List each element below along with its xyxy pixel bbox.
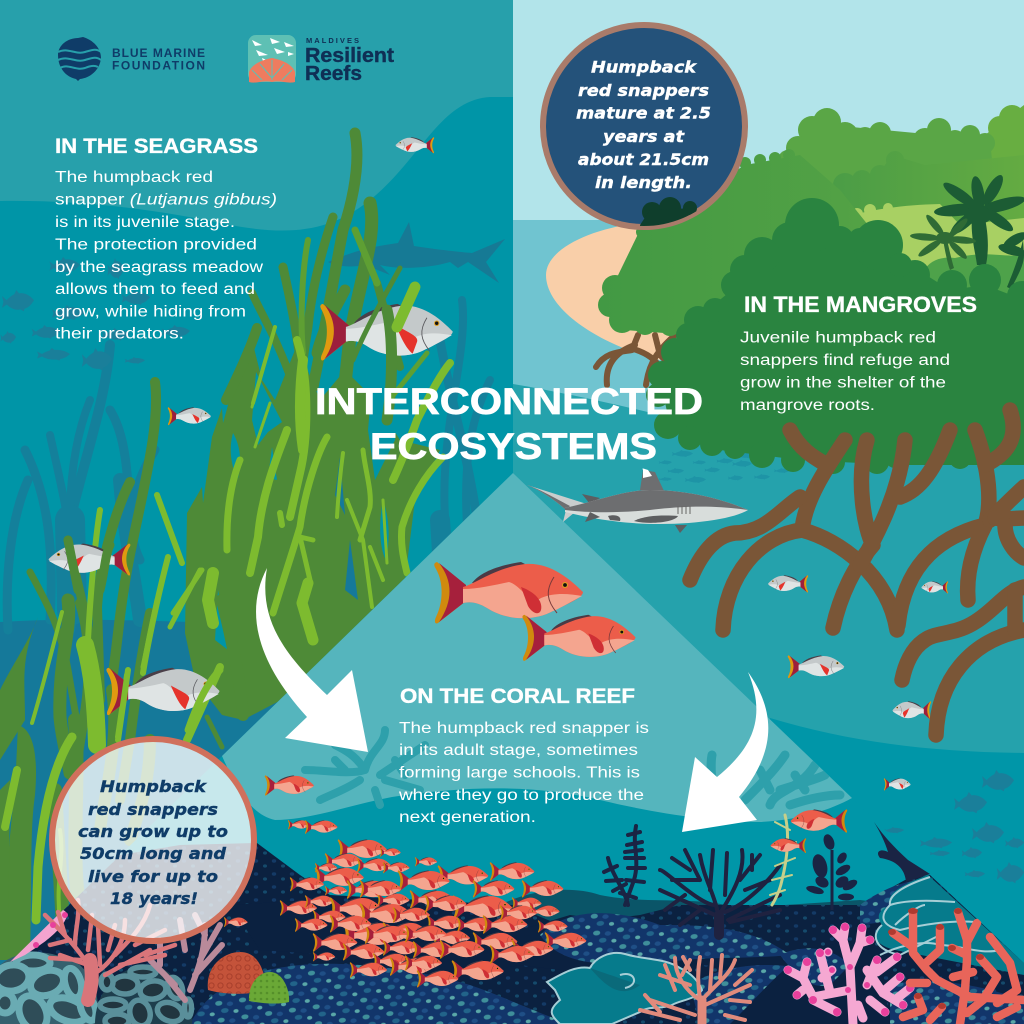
background: right sky and sea	[513, 0, 1024, 1024]
text block: in the seagrass: their predators.	[55, 326, 184, 343]
mangrove canopy: middle tree	[598, 149, 880, 336]
leafy plant, dark	[805, 833, 859, 910]
red snappers: scattered fish	[224, 775, 847, 927]
table coral, lower centre	[547, 953, 702, 1024]
text block: in the mangroves: grow in the shelter of the	[740, 375, 946, 392]
text block: on the coral reef: next generation.	[399, 809, 536, 826]
text block: on the coral reef: The humpback red snapper is	[399, 720, 649, 737]
callout: size and lifespan: Humpback	[100, 777, 208, 796]
mangrove canopy: far trees	[720, 105, 1024, 300]
palm tree, small	[910, 213, 976, 270]
coral: mauve branching	[150, 915, 222, 1000]
callout: size and lifespan: 18 years!	[110, 889, 198, 908]
triangle: coral reef zone	[0, 473, 1024, 1024]
callout: maturity: mature at 2.5	[576, 104, 711, 123]
logo: Maldives Resilient Reefs: MALDIVES	[306, 36, 359, 45]
background: left seagrass water	[0, 0, 513, 1024]
text block: on the coral reef: where they go to produce the	[398, 787, 644, 804]
text block: in the seagrass: The humpback red	[55, 169, 213, 186]
beach	[546, 222, 700, 360]
sea fan coral, dark	[660, 850, 780, 935]
coral: pink branching	[784, 923, 914, 1024]
text block: on the coral reef: forming large schools. This is	[399, 765, 640, 782]
callout: size and lifespan: can grow up to	[78, 822, 228, 841]
brain corals, bottom left	[0, 952, 99, 1024]
logo: Maldives Resilient Reefs	[248, 35, 394, 85]
callout: size and lifespan: 50cm long and	[80, 844, 227, 863]
logo: Blue Marine Foundation: FOUNDATION	[112, 58, 205, 72]
pale feathery plant	[770, 815, 796, 905]
distant fish school near shark	[659, 450, 790, 483]
title: INTERCONNECTED	[315, 381, 703, 422]
palm tree, tall	[934, 172, 1024, 289]
text block: in the seagrass: The protection provided	[55, 237, 257, 254]
silhouette fish, left	[0, 257, 190, 370]
pink coral tips	[33, 912, 68, 948]
brain corals, darker	[95, 965, 192, 1024]
text block: in the seagrass: grow, while hiding from	[55, 304, 246, 321]
logo: Blue Marine Foundation	[58, 37, 205, 81]
seagrass: back blades	[0, 133, 443, 960]
small mangrove roots at beach	[596, 330, 680, 385]
white arrow left	[256, 568, 368, 752]
callout: size and lifespan	[52, 739, 254, 941]
text block: in the mangroves: Juvenile humpback red	[740, 330, 936, 347]
coral silhouettes in light zone	[305, 730, 840, 805]
table coral, right	[876, 875, 1024, 975]
text block: on the coral reef	[398, 685, 649, 826]
mangrove roots	[690, 410, 1024, 735]
logo: Blue Marine Foundation: BLUE MARINE	[112, 46, 205, 60]
coral: salmon branching	[640, 955, 752, 1024]
silhouette fish, right	[884, 770, 1024, 883]
corner pink patch	[10, 910, 67, 962]
background silhouettes: seagrass	[7, 300, 490, 630]
text block: in the seagrass: by the seagrass meadow	[55, 259, 264, 276]
red snappers: large adult pair	[434, 562, 635, 661]
mangrove canopy: foreground tree	[646, 198, 1024, 474]
text block: in the mangroves	[740, 292, 977, 414]
red snapper school	[280, 839, 586, 988]
text block: in the seagrass: is in its juvenile stage.	[55, 214, 235, 231]
callout: maturity: red snappers	[578, 81, 709, 100]
text block: on the coral reef: ON THE CORAL REEF	[400, 685, 635, 708]
callout: size and lifespan: live for up to	[88, 867, 218, 886]
text block: in the seagrass: IN THE SEAGRASS	[55, 135, 258, 158]
callout: maturity	[543, 25, 745, 240]
text block: in the mangroves: IN THE MANGROVES	[744, 292, 977, 317]
silhouette: shark in the seagrass	[328, 222, 505, 283]
orange dome coral	[208, 952, 266, 994]
callout: maturity: Humpback	[591, 58, 697, 77]
fish: grey juvenile snappers in seagrass	[49, 137, 453, 715]
title: ECOSYSTEMS	[370, 426, 657, 467]
reef: rock base and bubbles	[0, 843, 1024, 1024]
coral: pink branching left	[45, 900, 175, 1000]
text block: in the seagrass	[55, 135, 277, 343]
juvenile grey fish, mangroves	[768, 575, 948, 791]
kelp, dark	[604, 826, 645, 905]
logo: Maldives Resilient Reefs: Reefs	[305, 63, 362, 85]
callout: maturity: about 21.5cm	[578, 150, 709, 169]
text block: in the seagrass: allows them to feed and	[55, 281, 255, 298]
callout: maturity: years at	[603, 127, 685, 146]
logo: Maldives Resilient Reefs: Resilient	[305, 45, 394, 67]
text block: on the coral reef: in its adult stage, sometimes	[399, 742, 638, 759]
seagrass: front blades	[68, 268, 450, 740]
shark	[527, 468, 748, 533]
dark branch, right edge	[874, 822, 930, 882]
title	[315, 381, 703, 467]
coral: red branching	[888, 908, 1024, 1024]
text block: in the mangroves: mangrove roots.	[740, 397, 875, 414]
white arrow right	[682, 672, 768, 832]
callout: size and lifespan: red snappers	[88, 800, 218, 819]
callout: maturity: in length.	[595, 173, 692, 192]
text block: in the seagrass: snapper (Lutjanus gibbus)	[55, 192, 277, 209]
green dome coral	[249, 972, 289, 1004]
seagrass: gaps in the meadow	[215, 372, 400, 650]
text block: in the mangroves: snappers find refuge and	[740, 352, 950, 369]
